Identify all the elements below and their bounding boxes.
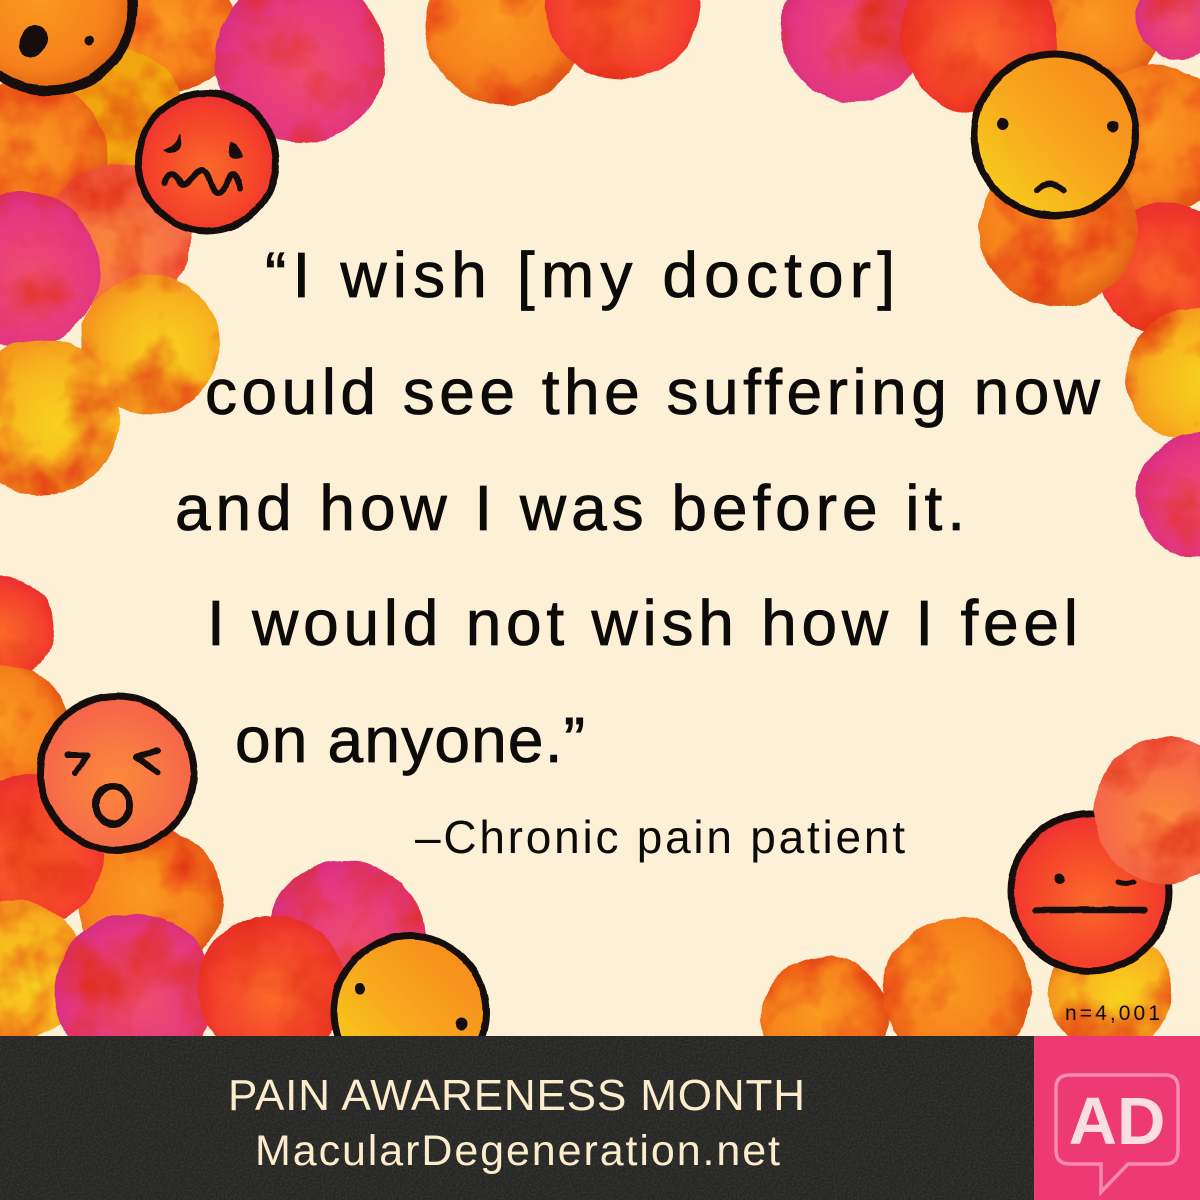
quote text: I would not wish how I feel <box>207 587 1078 659</box>
quote text: on anyone.” <box>235 704 585 776</box>
face: yellow sad <box>974 54 1136 216</box>
watercolor circles: bottom right <box>761 918 1172 1084</box>
quote text: could see the suffering now <box>205 356 1101 428</box>
sample size: n=4,001 <box>1065 1002 1160 1025</box>
watercolor circles: bottom left <box>0 576 425 1073</box>
footer website: MacularDegeneration.net <box>255 1127 780 1175</box>
face: squinting, open mouth <box>40 696 194 850</box>
attribution: –Chronic pain patient <box>415 811 905 863</box>
footer bar <box>0 1036 1034 1200</box>
watercolor circles: top right <box>781 0 1200 558</box>
watercolor circles: top centre <box>425 0 700 105</box>
logo: AD speech bubble: AD <box>1069 1084 1165 1159</box>
quote text: “I wish [my doctor] <box>265 239 895 311</box>
quote text: and how I was before it. <box>175 472 965 544</box>
watercolor circle: overlapping bottom-right face <box>1094 737 1200 883</box>
face: bottom, looking sideways <box>334 936 486 1088</box>
quote text <box>175 239 1101 776</box>
footer heading: PAIN AWARENESS MONTH <box>228 1071 805 1120</box>
face: top left, surprised <box>0 0 133 91</box>
watercolor circles: top left <box>0 0 385 495</box>
face: flat mouth red <box>1011 813 1169 971</box>
logo: AD speech bubble <box>1034 1036 1200 1200</box>
face: worried red <box>138 93 276 231</box>
